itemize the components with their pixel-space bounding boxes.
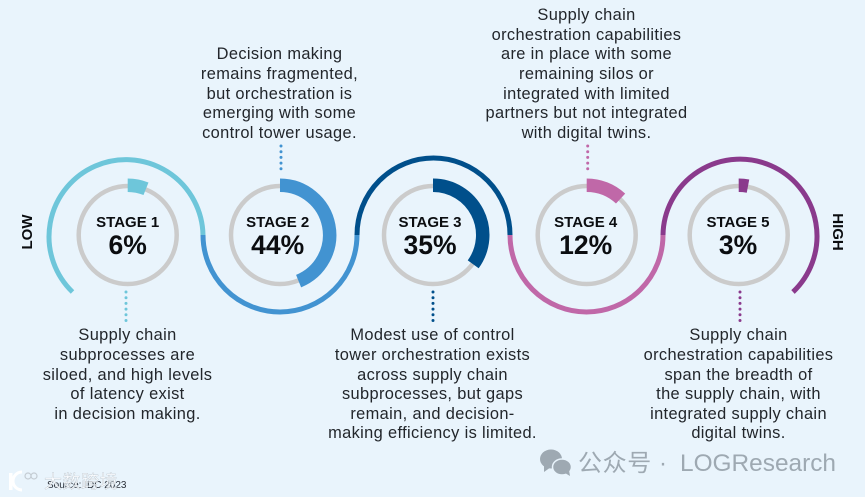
description: stage 2: control tower usage. [202,124,357,142]
description: stage 3: remain, and decision- [350,405,515,423]
source note: Source: IDC 2023 [47,480,127,491]
description: stage 2 [201,45,358,142]
watermark: account name: LOGResearch [680,450,836,477]
dotted connector: stage 5 [738,292,742,322]
description: stage 2: emerging with some [203,104,356,122]
description: stage 4: with digital twins. [521,124,651,142]
label: high: HIGH [829,213,846,251]
description: stage 5: integrated supply chain [650,405,827,423]
dotted connector: stage 3 [432,292,434,322]
stage 5 value: 3% [719,230,757,260]
description: stage 2: remains fragmented, [201,65,358,83]
donut: stage 4 12% [538,185,636,284]
stage 4 value [554,214,618,260]
dotted connector: stage 1 [124,292,128,322]
panel: stage 5 [644,159,833,442]
watermark: left logo [9,472,118,492]
wave arc: stage 3 [357,158,510,235]
description: stage 1 [43,326,212,423]
stage 1 value [96,214,159,260]
panel: stage 1 [43,160,212,423]
donut: stage 5 3% [690,185,788,284]
description: stage 1: siloed, and high levels [43,366,212,384]
stage 5 value [706,214,770,260]
description: stage 3: Modest use of control [350,326,515,344]
description: stage 3 [328,326,537,442]
description: stage 2: but orchestration is [207,85,352,103]
description: stage 4: integrated with limited [503,85,670,103]
dotted connector: stage 2 [280,146,282,172]
stage 3 value: STAGE 3 [398,214,462,231]
description: stage 4: are in place with some [501,45,672,63]
stage 2 value: STAGE 2 [246,214,309,231]
description: stage 1: subprocesses are [60,346,195,364]
description: stage 5: the supply chain, with [656,385,821,403]
dotted connector: stage 4 [586,146,589,172]
description: stage 4: partners but not integrated [486,104,687,122]
panel: stage 2 [201,45,358,312]
description: stage 1: Supply chain [78,326,177,344]
description: stage 5: digital twins. [691,424,786,442]
description: stage 4: Supply chain [537,6,636,24]
description: stage 4 [486,6,687,142]
description: stage 3: making efficiency is limited. [328,424,537,442]
stage 3 value: 35% [403,230,457,260]
description: stage 5: span the breadth of [664,366,813,384]
wave arc: stage 2 [203,235,357,312]
description: stage 3: tower orchestration exists [335,346,530,364]
description: stage 3: subprocesses, but gaps [342,385,523,403]
description: stage 5: orchestration capabilities [644,346,833,364]
stage 4 value: 12% [559,230,612,260]
watermark: account name: · [659,450,667,477]
watermark: wechat icon [540,450,572,476]
description: stage 4: remaining silos or [519,65,654,83]
donut: stage 3 35% [384,185,483,284]
wave arc: stage 4 [510,235,663,312]
stage 2 value: 44% [251,230,304,260]
description: stage 2: Decision making [217,45,342,63]
stage 5 value: STAGE 5 [706,214,770,231]
panel: stage 3 [328,158,537,442]
description: stage 3: across supply chain [357,366,508,384]
description: stage 5 [644,326,833,442]
stage 3 value [398,214,462,260]
wave arc: stage 1 [49,160,203,292]
label: low: LOW [19,214,36,250]
panel: stage 4 [486,6,687,312]
stage 2 value [246,214,309,260]
wave arc: stage 5 [663,159,817,292]
donut: stage 2 44% [231,185,330,284]
stage 4 value: STAGE 4 [554,214,618,231]
donut: stage 1 6% [79,185,177,284]
watermark: account name [578,450,836,477]
stage 1 value: 6% [109,230,147,260]
watermark: account name: 公众号 [578,450,652,477]
description: stage 1: in decision making. [54,405,201,423]
description: stage 5: Supply chain [689,326,788,344]
watermark: left logo: 大数跨境 [44,472,118,492]
description: stage 4: orchestration capabilities [492,26,681,44]
stage 1 value: STAGE 1 [96,214,159,231]
description: stage 1: of latency exist [70,385,185,403]
